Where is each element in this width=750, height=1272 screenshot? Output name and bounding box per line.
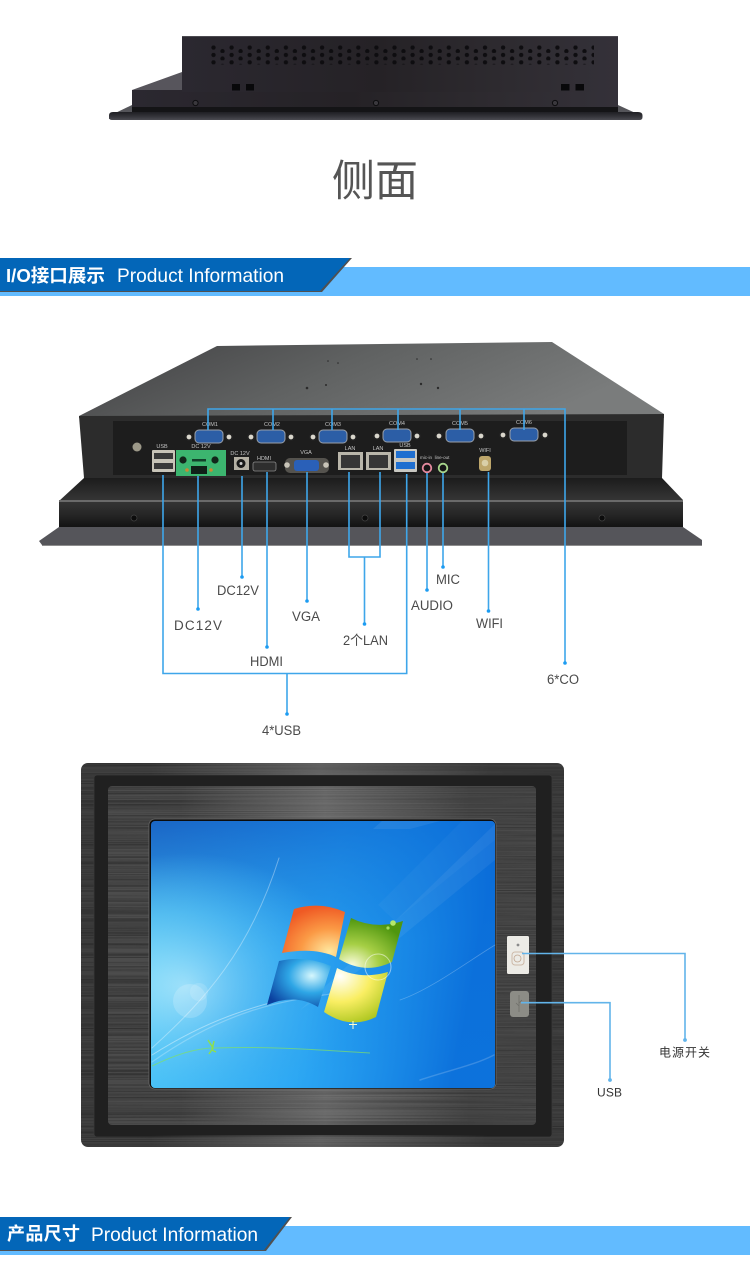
audio jacks: line-out <box>435 455 450 460</box>
brushed plate <box>108 786 536 1125</box>
HDMI port: HDMI <box>257 456 271 462</box>
port labels: WIFI <box>476 616 503 631</box>
product photo: rear I/O view <box>39 342 702 546</box>
LAN ports <box>338 446 391 470</box>
WiFi antenna connector: WIFI <box>479 448 491 454</box>
COM bracket <box>208 409 565 663</box>
section banner: I/O: Product Information <box>117 265 284 287</box>
front flange <box>39 527 702 545</box>
DC jack <box>230 451 250 470</box>
section banner: dimensions <box>0 1217 750 1255</box>
callouts: rear ports <box>163 409 567 716</box>
section banner: I/O: I/O接口展示 <box>6 266 105 286</box>
green power terminal <box>176 444 226 476</box>
audio jacks <box>420 455 450 472</box>
mounting slots <box>232 84 584 90</box>
callout: power switch <box>522 954 710 1060</box>
callout: USB: USB <box>597 1086 622 1100</box>
screen bezel <box>149 819 496 1089</box>
callout: USB <box>521 1003 622 1100</box>
power button <box>507 936 529 974</box>
swoosh lines <box>152 858 495 1080</box>
section banner: dimensions: 产品尺寸 <box>7 1224 80 1244</box>
stepped lip <box>59 478 683 501</box>
screws <box>193 100 558 106</box>
LAN ports: LAN <box>345 446 355 452</box>
USB 2.0 port <box>152 444 175 472</box>
COM ports: COM4 <box>389 421 405 427</box>
COM ports: COM5 <box>452 421 468 427</box>
COM ports: COM3 <box>325 422 341 428</box>
USB bracket <box>163 474 407 714</box>
lines to labels <box>197 476 199 609</box>
COM ports <box>186 420 548 443</box>
COM ports: COM2 <box>264 422 280 428</box>
vent holes <box>209 46 594 64</box>
COM ports: COM1 <box>202 422 218 428</box>
top surface <box>79 342 664 418</box>
port labels: DC12V <box>217 583 259 598</box>
product photo: front panel <box>81 763 564 1147</box>
callout: power switch: 电源开关 <box>659 1046 710 1060</box>
green power terminal: DC 12V <box>191 444 211 450</box>
section banner: I/O <box>0 258 750 296</box>
heading: side view: 侧面 <box>332 158 418 206</box>
screen <box>151 821 495 1088</box>
VGA port <box>284 450 329 473</box>
port labels: 4*USB <box>262 723 301 738</box>
audio jacks: mic-in <box>420 455 432 460</box>
port labels: HDMI <box>250 654 283 669</box>
port labels: 2个LAN <box>343 633 388 648</box>
USB 2.0 port: USB <box>156 444 168 450</box>
USB port cover <box>510 991 529 1017</box>
USB 3.0 port <box>394 443 417 472</box>
back face <box>79 414 664 478</box>
COM ports: COM6 <box>516 420 532 426</box>
port labels: MIC <box>436 572 460 587</box>
recessed band <box>94 775 552 1137</box>
port labels: VGA <box>292 609 320 624</box>
USB 3.0 port: USB <box>399 443 411 449</box>
LAN ports: LAN <box>373 446 383 452</box>
ground screw <box>132 442 142 452</box>
glass reflection <box>300 824 495 1010</box>
HDMI port <box>253 456 276 471</box>
port labels: AUDIO <box>411 598 453 613</box>
port labels <box>174 572 579 738</box>
port labels: DC12V <box>174 618 222 633</box>
VGA port: VGA <box>300 450 312 456</box>
port labels: 6*CO <box>547 672 579 687</box>
outer bezel <box>81 763 564 1147</box>
Windows logo <box>267 906 403 1029</box>
WiFi antenna connector <box>479 448 491 471</box>
flange slope <box>109 105 642 119</box>
section banner: dimensions: Product Information <box>91 1224 258 1246</box>
product photo: side view <box>109 36 642 120</box>
DC jack: DC 12V <box>230 451 250 457</box>
